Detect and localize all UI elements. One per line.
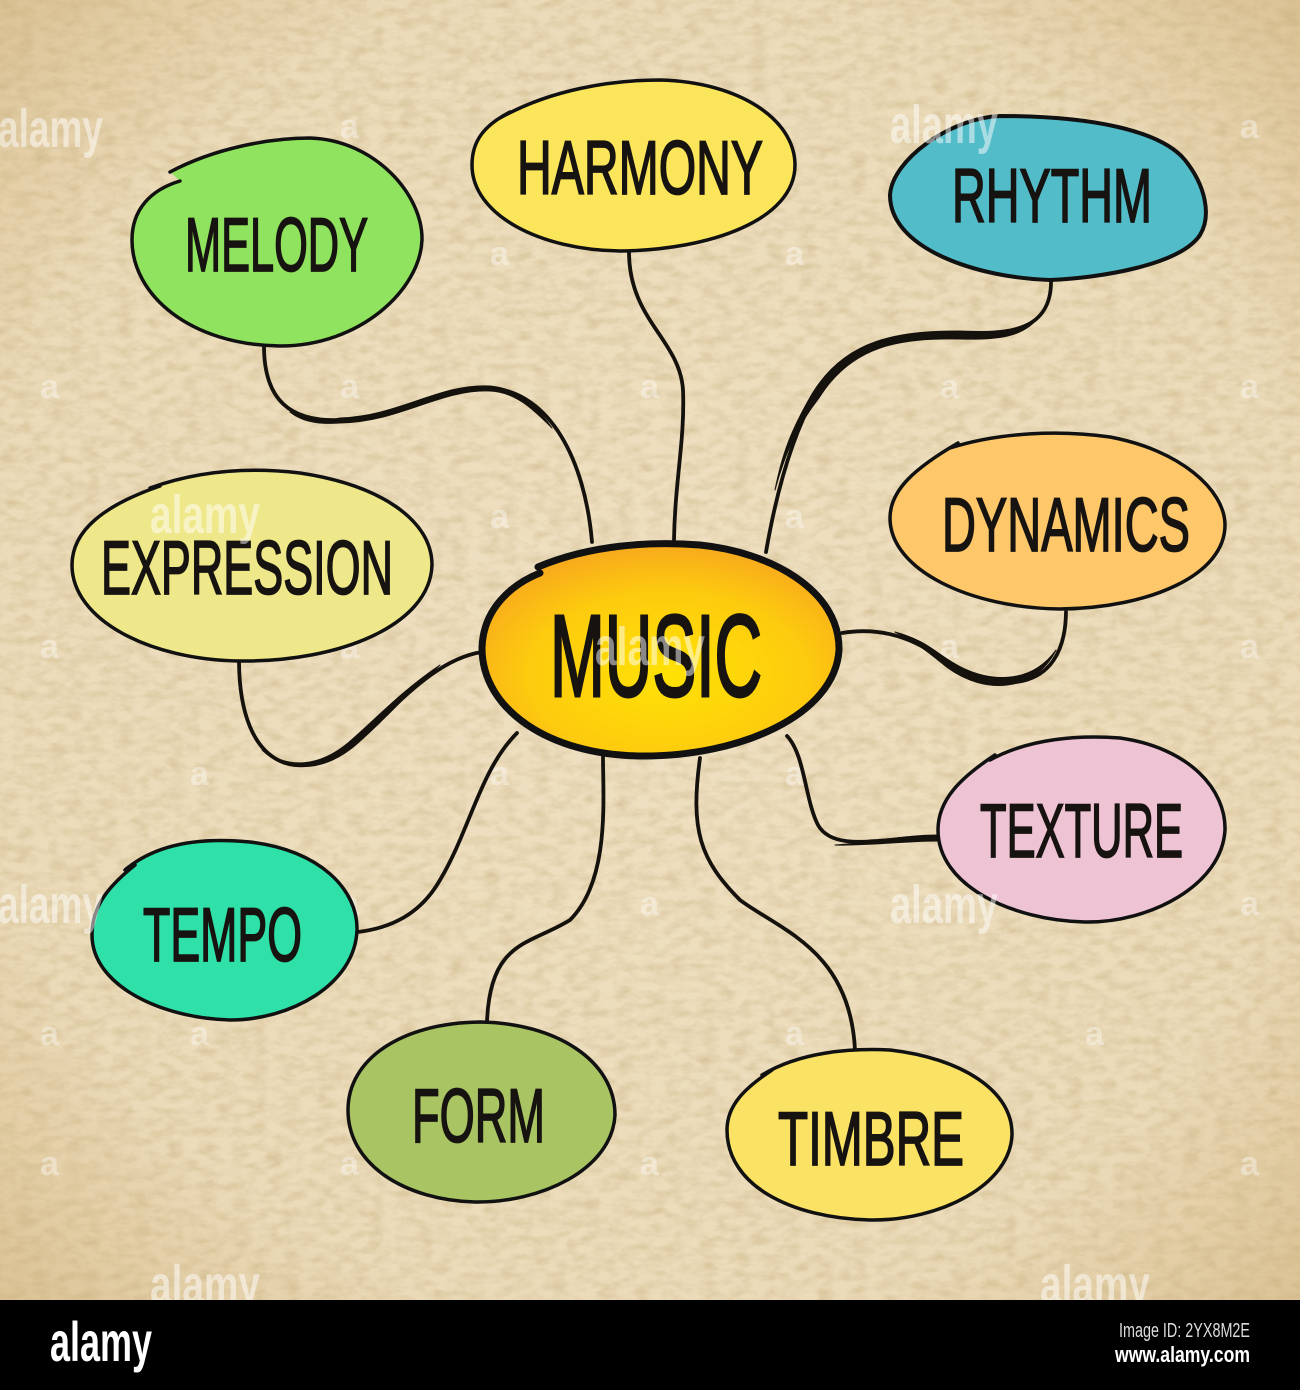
small watermark marks: a (1240, 885, 1260, 923)
small watermark marks: a (190, 1015, 210, 1053)
footer bar (0, 1300, 1300, 1390)
node: melody (132, 138, 422, 346)
small watermark marks: a (340, 368, 360, 406)
footer logo: alamy (50, 1310, 152, 1373)
node: texture (938, 737, 1225, 922)
image id: Image ID: 2YX8M2E (1119, 1320, 1250, 1342)
node: dynamics (890, 433, 1225, 609)
node: tempo: TEMPO (143, 893, 302, 978)
small watermark marks: a (640, 108, 660, 146)
small watermark marks: a (940, 368, 960, 406)
small watermark marks: a (940, 628, 960, 666)
small watermark marks: a (40, 1015, 60, 1053)
small watermark marks (40, 108, 1260, 1183)
small watermark marks: a (40, 1145, 60, 1183)
small watermark marks: a (785, 235, 805, 273)
small watermark marks: a (40, 368, 60, 406)
watermarks: alamy (890, 875, 998, 935)
node: timbre (727, 1050, 1012, 1220)
node: timbre: TIMBRE (778, 1097, 964, 1182)
small watermark marks: a (640, 885, 660, 923)
watermarks (0, 95, 1150, 1315)
small watermark marks: a (340, 108, 360, 146)
small watermark marks: a (340, 1145, 360, 1183)
small watermark marks: a (785, 1015, 805, 1053)
small watermark marks: a (1085, 235, 1105, 273)
small watermark marks: a (1085, 1015, 1105, 1053)
small watermark marks: a (1085, 755, 1105, 793)
small watermark marks: a (340, 885, 360, 923)
small watermark marks: a (490, 755, 510, 793)
watermarks: alamy (890, 95, 998, 155)
small watermark marks: a (490, 235, 510, 273)
watermarks: alamy (150, 485, 260, 545)
watermarks: alamy (150, 1255, 260, 1315)
node: music centre: MUSIC (550, 591, 762, 721)
node: form (348, 1022, 615, 1202)
node: rhythm (890, 116, 1206, 280)
node: harmony (472, 80, 795, 251)
node: rhythm: RHYTHM (952, 154, 1152, 239)
small watermark marks: a (340, 628, 360, 666)
small watermark marks: a (40, 628, 60, 666)
small watermark marks: a (1240, 108, 1260, 146)
small watermark marks: a (785, 755, 805, 793)
node: tempo (92, 840, 357, 1020)
small watermark marks: a (1240, 628, 1260, 666)
small watermark marks: a (940, 1145, 960, 1183)
small watermark marks: a (490, 498, 510, 536)
small watermark marks: a (640, 1145, 660, 1183)
node: music centre (482, 544, 839, 756)
node: form: FORM (412, 1074, 545, 1159)
small watermark marks: a (1240, 368, 1260, 406)
small watermark marks: a (490, 1015, 510, 1053)
watermarks: alamy (0, 875, 103, 935)
watermarks: alamy (595, 617, 705, 677)
connector lines (239, 252, 1066, 1050)
watermarks: alamy (1040, 1255, 1150, 1315)
small watermark marks: a (640, 368, 660, 406)
node: melody: MELODY (185, 203, 368, 288)
small watermark marks: a (190, 755, 210, 793)
node: harmony: HARMONY (517, 126, 763, 211)
small watermark marks: a (1240, 1145, 1260, 1183)
small watermark marks: a (1085, 498, 1105, 536)
small watermark marks: a (785, 498, 805, 536)
watermarks: alamy (0, 99, 103, 159)
node: expression (72, 470, 432, 661)
website: www.alamy.com (1114, 1342, 1250, 1367)
node: expression: EXPRESSION (101, 526, 393, 611)
